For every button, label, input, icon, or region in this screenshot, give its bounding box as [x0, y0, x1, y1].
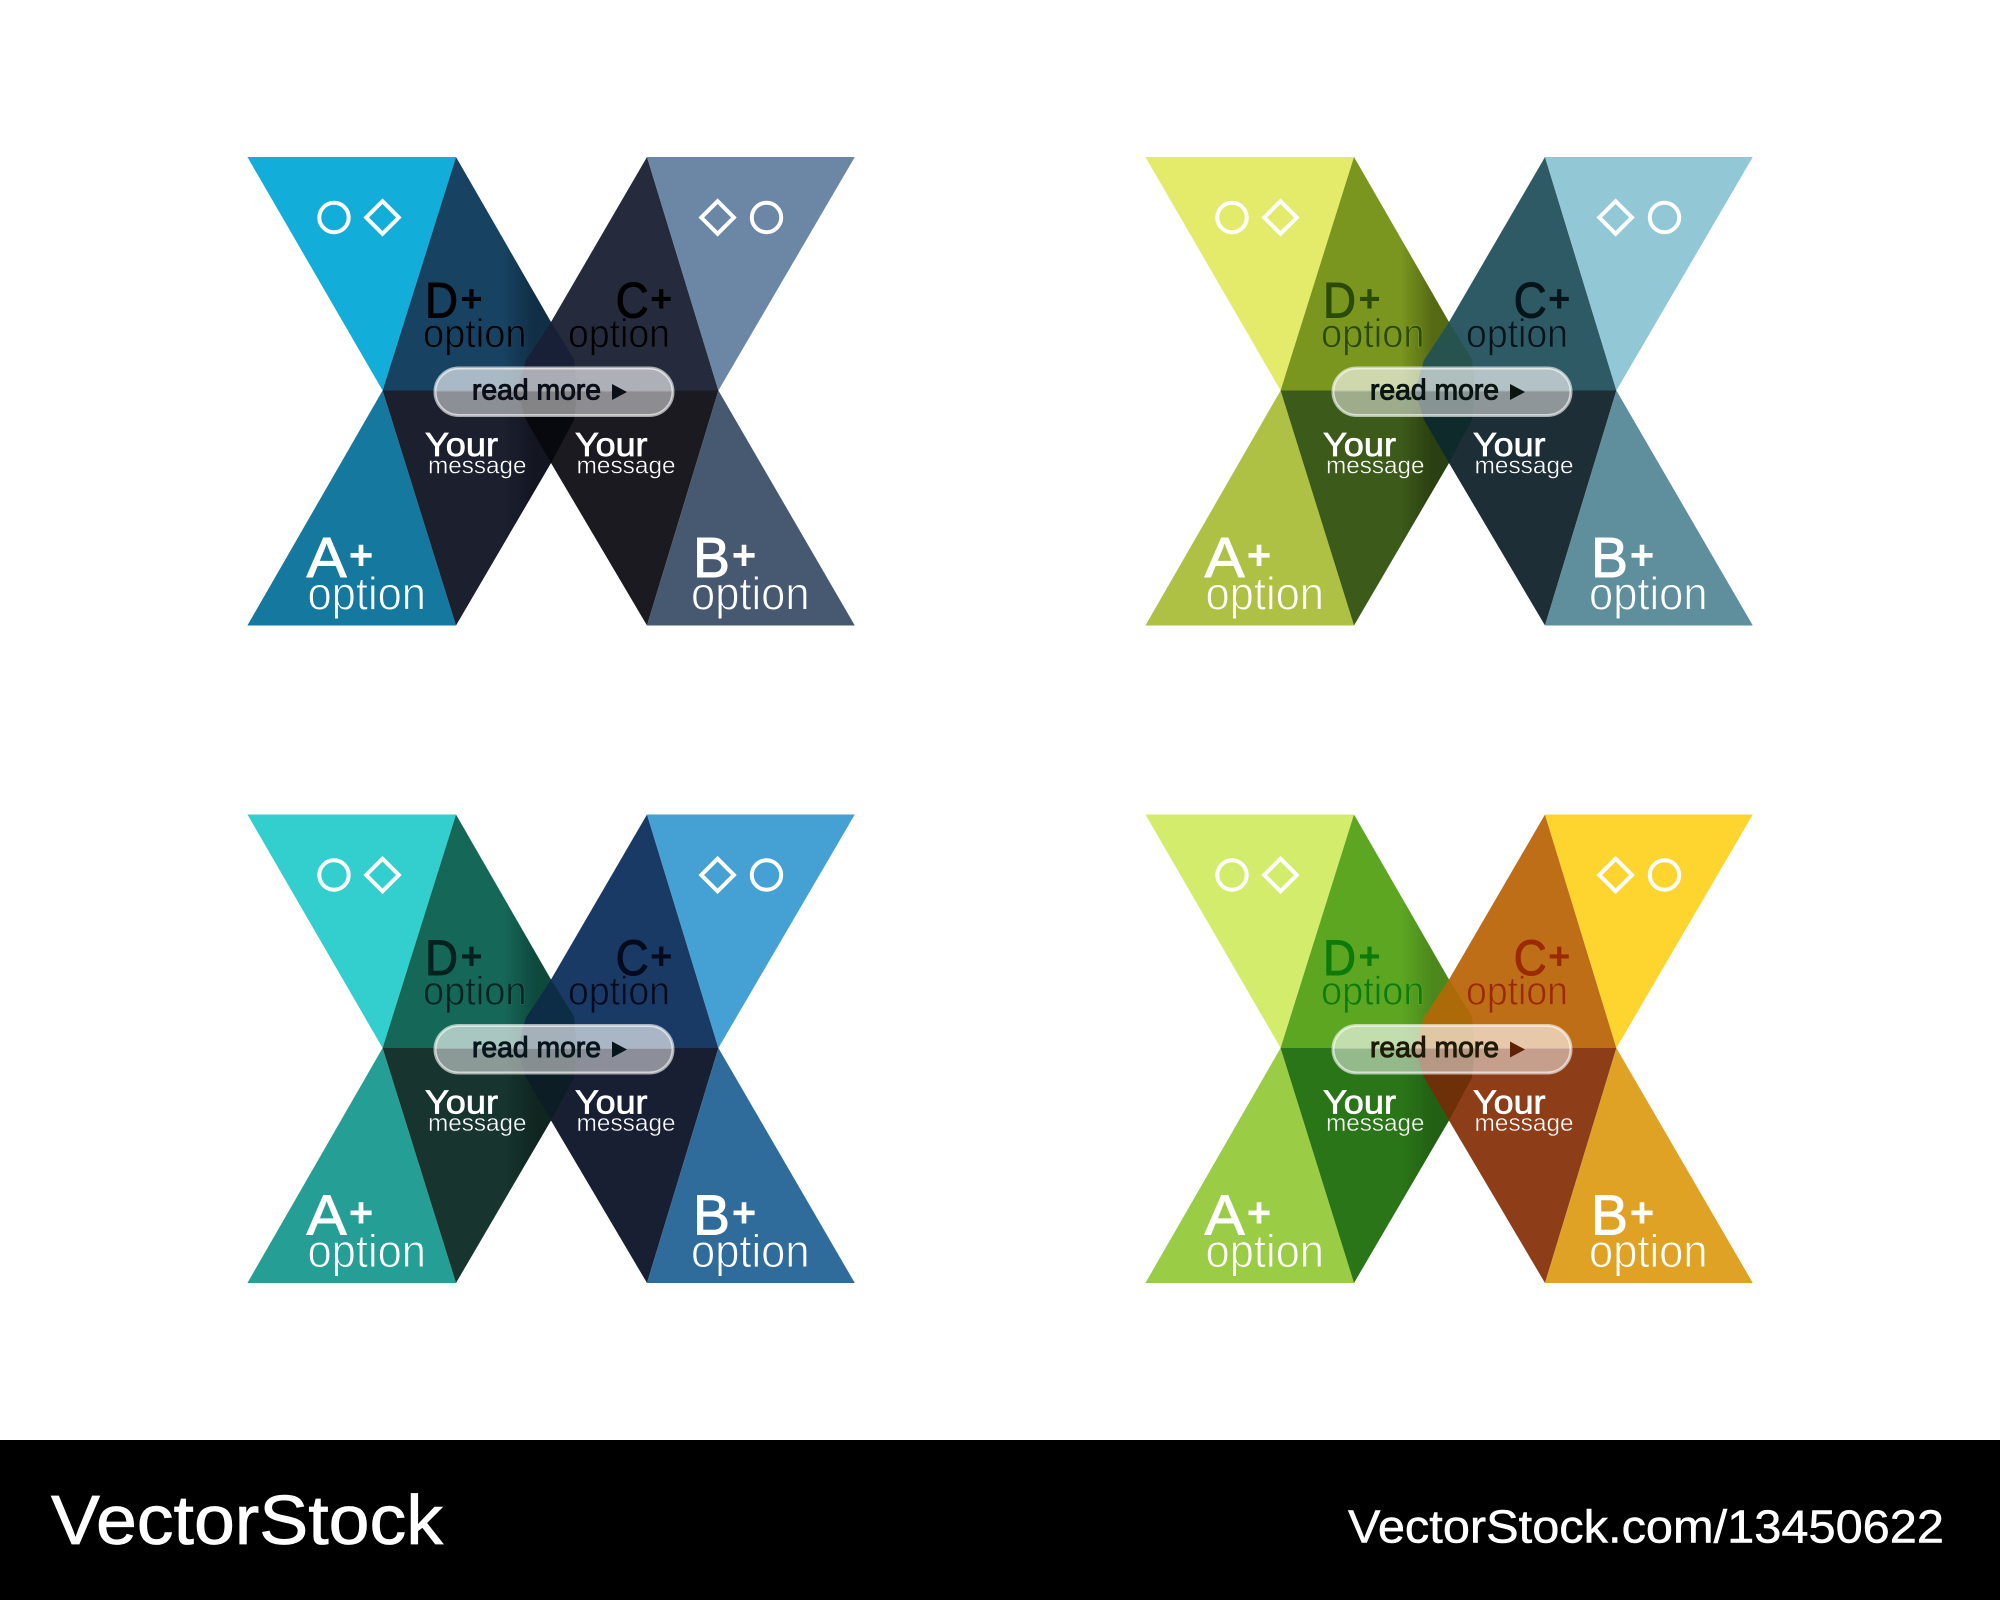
overlap: top centre: [517, 322, 577, 390]
label: right your message: [575, 426, 676, 480]
segment: bottom right triangle: [647, 390, 855, 626]
panel: green and orange X infographic: [1145, 814, 1753, 1283]
panel: teal and blue X infographic: [247, 814, 855, 1283]
label: D+ option: option: [423, 970, 526, 1014]
label: D+ option: [1321, 930, 1424, 1014]
label: right your message: message: [1475, 452, 1574, 480]
label: C+ option: option: [1466, 970, 1568, 1014]
label: B+ option: [691, 526, 810, 620]
label: right your message: [1473, 426, 1574, 480]
icon: left circle: [1217, 203, 1247, 232]
icon: left diamond: [1264, 859, 1297, 891]
button: read more: [435, 1026, 673, 1073]
label: right your message: Your: [575, 426, 648, 463]
segment: top left triangle: [1145, 814, 1354, 1048]
label: C+ option: [568, 272, 672, 356]
label: left your message: message: [1326, 452, 1424, 480]
footer brand: VectorStock: VectorStock: [51, 1481, 444, 1559]
segment: top right triangle: [647, 814, 855, 1048]
label: right your message: Your: [1473, 1084, 1546, 1120]
button: read more: read more: [1370, 1032, 1499, 1064]
label: A+ option: option: [1206, 568, 1324, 620]
label: A+ option: +: [1247, 532, 1271, 578]
footer bar: [0, 1440, 2000, 1600]
segment: C option fold: [1415, 814, 1616, 1048]
overlap: top centre: [517, 980, 577, 1048]
label: A+ option: [307, 526, 426, 620]
segment: right message fold: [517, 1048, 718, 1283]
label: B+ option: [1589, 1184, 1708, 1277]
label: B+ option: [691, 1184, 810, 1277]
icon: right circle: [1650, 860, 1679, 890]
icon: left circle: [1217, 860, 1247, 890]
label: C+ option: C: [616, 272, 649, 328]
label: right your message: message: [1475, 1110, 1574, 1137]
label: B+ option: +: [732, 532, 756, 578]
segment: bottom right triangle: [1545, 390, 1753, 626]
segment: bottom left triangle: [1145, 1048, 1354, 1283]
icon: right diamond: [701, 859, 734, 891]
label: left your message: Your: [425, 1084, 498, 1120]
label: C+ option: +: [650, 936, 672, 978]
overlap: bottom centre: [1415, 390, 1475, 463]
label: D+ option: D: [1323, 930, 1356, 986]
label: C+ option: option: [568, 970, 670, 1014]
footer url: VectorStock.com/13450622: [1348, 1501, 1944, 1553]
segment: top left triangle: [247, 157, 456, 390]
label: left your message: Your: [425, 426, 498, 463]
overlap: top centre: [1415, 322, 1475, 390]
label: C+ option: +: [650, 278, 672, 320]
label: C+ option: +: [1548, 278, 1570, 320]
label: A+ option: option: [308, 568, 426, 620]
label: B+ option: +: [1630, 532, 1654, 578]
icon: left diamond: [366, 201, 399, 234]
icon: left circle: [319, 203, 349, 232]
label: D+ option: +: [1358, 936, 1381, 978]
label: B+ option: B: [1591, 526, 1628, 590]
label: B+ option: [1589, 526, 1708, 620]
label: C+ option: option: [568, 312, 670, 356]
label: A+ option: +: [349, 1189, 373, 1236]
label: left your message: message: [428, 1110, 526, 1137]
label: C+ option: [1466, 930, 1570, 1014]
segment: bottom left triangle: [247, 1048, 456, 1283]
label: D+ option: [423, 930, 526, 1014]
label: C+ option: C: [1514, 930, 1547, 986]
icon: right diamond: [1599, 859, 1632, 891]
segment: bottom right triangle: [1545, 1048, 1753, 1283]
icon: right circle: [1650, 203, 1679, 232]
label: left your message: message: [1326, 1110, 1424, 1137]
segment: D option fold: [1281, 157, 1474, 390]
label: A+ option: A: [1205, 526, 1245, 590]
label: B+ option: B: [1591, 1184, 1628, 1248]
label: C+ option: +: [1548, 936, 1570, 978]
label: D+ option: +: [460, 278, 483, 320]
label: D+ option: option: [423, 312, 526, 356]
label: C+ option: option: [1466, 312, 1568, 356]
label: D+ option: option: [1321, 312, 1424, 356]
segment: D option fold: [383, 157, 576, 390]
segment: D option fold: [1281, 814, 1474, 1048]
label: B+ option: option: [1589, 568, 1708, 620]
label: A+ option: [307, 1184, 426, 1277]
button: read more: read more: [472, 1032, 601, 1064]
label: left your message: Your: [1323, 1084, 1396, 1120]
segment: bottom right triangle: [647, 1048, 855, 1283]
label: right your message: [1473, 1084, 1574, 1137]
segment: right message fold: [517, 390, 718, 626]
segment: C option fold: [517, 814, 718, 1048]
label: left your message: [425, 1084, 526, 1137]
label: A+ option: +: [1247, 1189, 1271, 1236]
panel: lime and teal X infographic: [1145, 157, 1753, 626]
label: left your message: [425, 426, 526, 480]
segment: right message fold: [1415, 1048, 1616, 1283]
label: C+ option: C: [616, 930, 649, 986]
overlap: top centre: [1415, 980, 1475, 1048]
segment: C option fold: [1415, 157, 1616, 390]
label: D+ option: D: [425, 272, 458, 328]
label: left your message: [1323, 426, 1424, 480]
segment: top left triangle: [247, 814, 456, 1048]
label: C+ option: C: [1514, 272, 1547, 328]
icon: right diamond: [1599, 201, 1632, 234]
button: read more: [1333, 368, 1571, 416]
button: read more: read more: [1370, 374, 1499, 406]
panel: blue X infographic: [247, 157, 855, 626]
label: right your message: Your: [1473, 426, 1546, 463]
label: C+ option: [568, 930, 672, 1014]
button: read more: read more: [472, 374, 601, 406]
label: B+ option: +: [732, 1189, 756, 1236]
overlap: bottom centre: [517, 390, 577, 463]
button: read more: [1333, 1026, 1571, 1073]
icon: right diamond: [701, 201, 734, 234]
label: right your message: message: [577, 452, 676, 480]
segment: bottom left triangle: [247, 390, 456, 626]
segment: left message fold: [383, 390, 576, 626]
segment: right message fold: [1415, 390, 1616, 626]
overlap: bottom centre: [1415, 1048, 1475, 1120]
label: A+ option: A: [307, 526, 347, 590]
label: right your message: [575, 1084, 676, 1137]
segment: D option fold: [383, 814, 576, 1048]
label: A+ option: [1205, 1184, 1324, 1277]
icon: left circle: [319, 860, 349, 890]
segment: bottom left triangle: [1145, 390, 1354, 626]
label: B+ option: option: [691, 568, 810, 620]
icon: right circle: [752, 860, 781, 890]
label: left your message: Your: [1323, 426, 1396, 463]
label: A+ option: A: [1205, 1184, 1245, 1248]
icon: left diamond: [1264, 201, 1297, 234]
label: right your message: Your: [575, 1084, 648, 1120]
icon: right circle: [752, 203, 781, 232]
segment: top left triangle: [1145, 157, 1354, 390]
button: read more: [435, 368, 673, 416]
label: B+ option: B: [693, 1184, 730, 1248]
segment: top right triangle: [647, 157, 855, 390]
label: D+ option: +: [460, 936, 483, 978]
segment: left message fold: [1281, 390, 1474, 626]
label: B+ option: option: [691, 1225, 810, 1277]
label: right your message: message: [577, 1110, 676, 1137]
label: D+ option: [423, 272, 526, 356]
label: A+ option: A: [307, 1184, 347, 1248]
segment: top right triangle: [1545, 157, 1753, 390]
segment: top right triangle: [1545, 814, 1753, 1048]
label: C+ option: [1466, 272, 1570, 356]
label: A+ option: option: [308, 1225, 426, 1277]
label: D+ option: D: [425, 930, 458, 986]
segment: left message fold: [383, 1048, 576, 1283]
segment: C option fold: [517, 157, 718, 390]
label: D+ option: +: [1358, 278, 1381, 320]
label: A+ option: [1205, 526, 1324, 620]
label: A+ option: +: [349, 532, 373, 578]
label: D+ option: option: [1321, 970, 1424, 1014]
label: left your message: message: [428, 452, 526, 480]
label: D+ option: [1321, 272, 1424, 356]
label: B+ option: option: [1589, 1225, 1708, 1277]
overlap: bottom centre: [517, 1048, 577, 1120]
label: A+ option: option: [1206, 1225, 1324, 1277]
segment: left message fold: [1281, 1048, 1474, 1283]
label: left your message: [1323, 1084, 1424, 1137]
label: B+ option: +: [1630, 1189, 1654, 1236]
icon: left diamond: [366, 859, 399, 891]
label: D+ option: D: [1323, 272, 1356, 328]
label: B+ option: B: [693, 526, 730, 590]
